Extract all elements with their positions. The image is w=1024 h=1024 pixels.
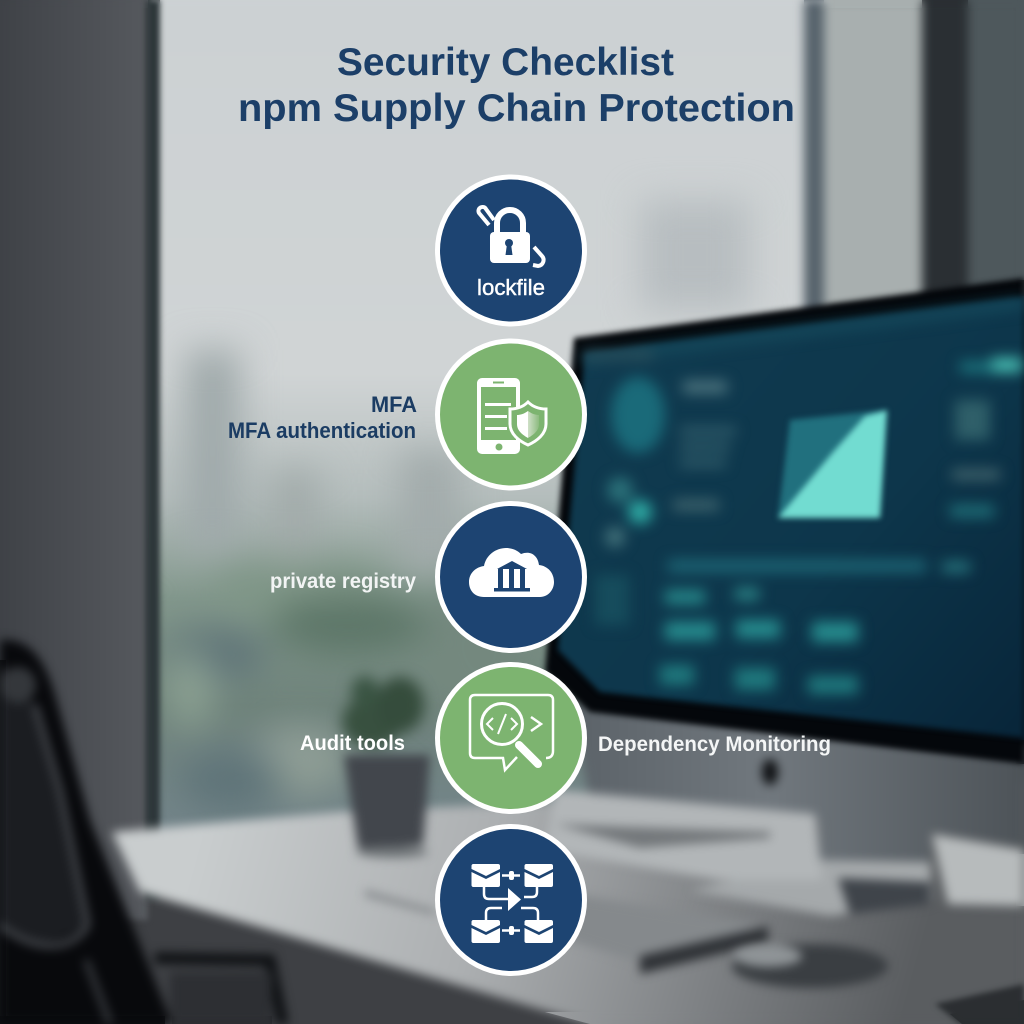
label: private registry: private registry — [270, 569, 416, 593]
dashboard chart — [778, 410, 887, 518]
bottom edge colours — [545, 1012, 1024, 1024]
step 2: MFA — [438, 341, 584, 488]
monitor bezel — [545, 278, 1024, 764]
icon: phone with shield — [477, 378, 546, 454]
icon: cloud with bank — [469, 548, 554, 597]
left edge colours — [0, 0, 8, 660]
plant pot — [344, 755, 430, 858]
step 1: lockfile — [438, 177, 584, 324]
plant — [342, 676, 424, 748]
label: lockfile: lockfile — [477, 275, 545, 300]
icon: code magnifier in speech bubble — [470, 695, 553, 770]
desk — [112, 780, 1024, 1024]
mouse — [732, 944, 888, 988]
title — [238, 41, 795, 130]
step 3: private registry — [438, 504, 584, 650]
blurred city and trees — [165, 200, 750, 810]
monitor chin and stand — [545, 700, 1024, 916]
label: audit tools: Audit tools — [300, 731, 405, 755]
step 4: audit tools — [438, 664, 584, 812]
label: MFA authentication — [228, 392, 417, 443]
monitor — [545, 278, 1024, 916]
title: npm Supply Chain Protection — [238, 87, 795, 130]
blurred dashboard — [582, 298, 1024, 694]
office chair — [0, 640, 283, 1024]
monitor screen — [558, 297, 1024, 738]
right pillars — [804, 0, 1024, 320]
window view — [150, 0, 830, 850]
icon: lock with broken chain — [478, 207, 544, 266]
icon: mail routing diagram — [471, 864, 553, 943]
label: MFA authentication: MFA — [371, 392, 417, 417]
window frame left — [146, 0, 160, 900]
label: MFA authentication: MFA authentication — [228, 418, 416, 443]
left wall — [0, 0, 148, 920]
top edge colours — [0, 0, 1024, 8]
step 5: mail workflow — [438, 826, 584, 974]
label: dependency monitoring: Dependency Monitoring — [598, 732, 831, 756]
title: Security Checklist — [337, 41, 674, 84]
dark object bottom right — [935, 984, 1024, 1024]
keyboard — [365, 883, 768, 974]
right edge colours — [1016, 0, 1024, 1024]
